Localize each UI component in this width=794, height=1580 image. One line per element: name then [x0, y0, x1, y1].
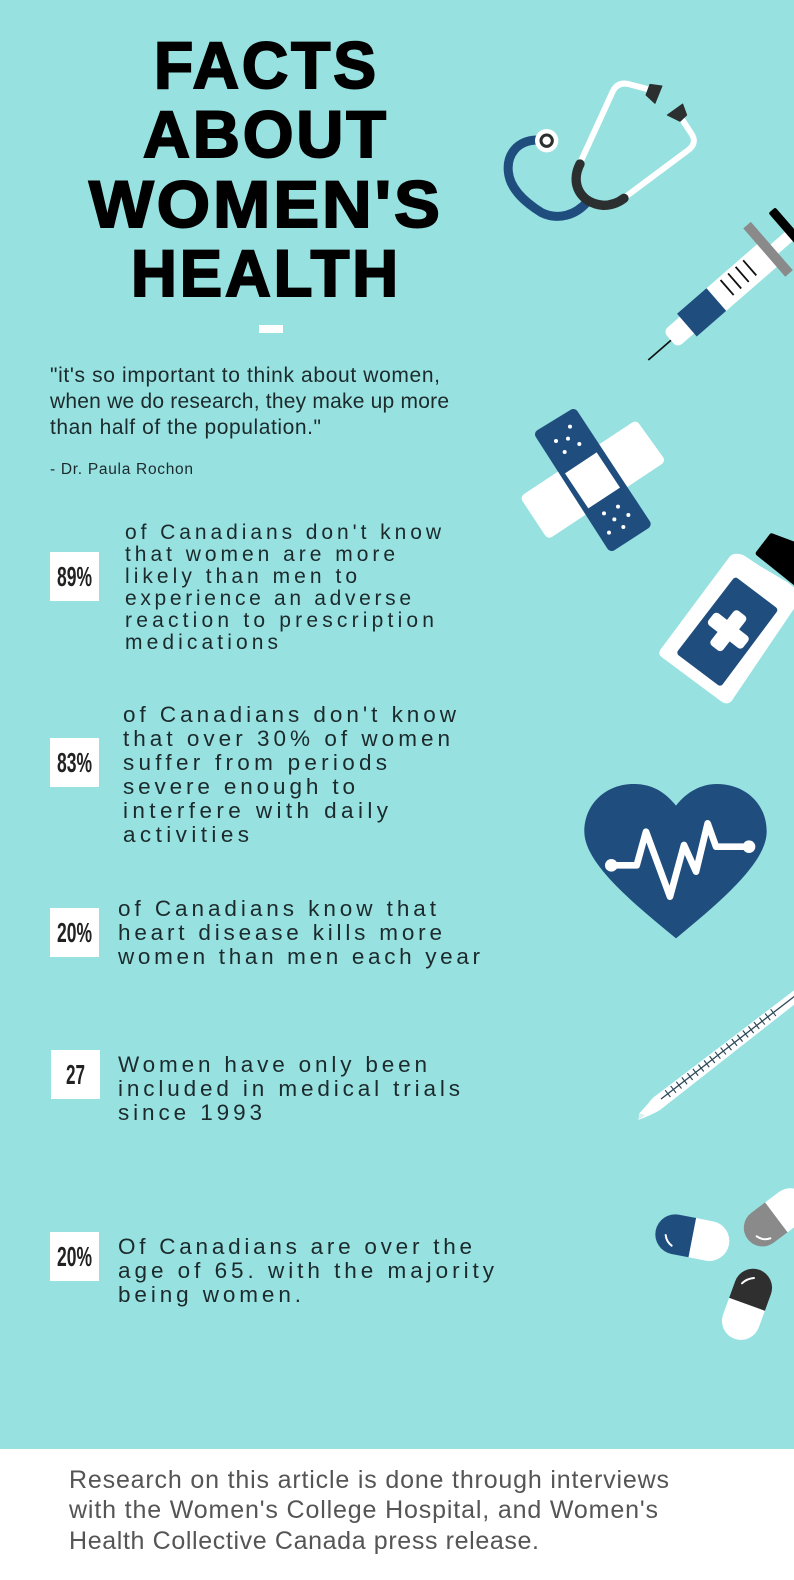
icon: heart with pulse line — [584, 784, 767, 938]
quote — [49, 364, 449, 439]
fact 4 text — [118, 1052, 460, 1125]
fact 1 text — [125, 521, 442, 654]
stat badge: 83%: 83% — [57, 747, 92, 778]
fact 1 — [50, 521, 442, 654]
stat badge: 27: 27 — [66, 1059, 85, 1090]
stat badge: 20% — [50, 1232, 99, 1281]
footer text: with the Women's College Hospital, and Women's — [68, 1496, 658, 1524]
title — [89, 28, 443, 310]
fact 3 — [50, 896, 480, 969]
footer text: Health Collective Canada press release. — [69, 1527, 539, 1555]
stat badge: 89%: 89% — [57, 561, 92, 592]
fact 3 text: of Canadians know that — [118, 896, 437, 921]
fact 2 text: interfere with daily — [123, 798, 389, 823]
stat badge: 20%: 20% — [57, 917, 92, 948]
quote: when we do research, they make up more — [49, 390, 449, 413]
pill: grey and white — [736, 1181, 794, 1254]
fact 2 text: suffer from periods — [123, 750, 387, 775]
stat badge: 27 — [51, 1050, 100, 1099]
fact 2 text: activities — [123, 822, 249, 847]
icon: bandage — [527, 414, 659, 546]
title: ABOUT — [143, 97, 389, 171]
fact 2 text — [123, 702, 457, 847]
fact 3 text: women than men each year — [117, 944, 480, 969]
fact 2 text: that over 30% of women — [123, 726, 450, 751]
fact 5 text: age of 65. with the majority — [118, 1258, 495, 1283]
icon: stethoscope — [508, 84, 694, 216]
title: FACTS — [154, 28, 379, 102]
footer band — [0, 1449, 794, 1580]
icon: thermometer — [638, 988, 794, 1120]
fact 5 text: Of Canadians are over the — [118, 1234, 472, 1259]
fact 1 text: medications — [125, 631, 278, 654]
fact 1 text: experience an adverse — [125, 587, 411, 610]
fact 2 — [50, 702, 457, 847]
fact 4 text: since 1993 — [118, 1100, 262, 1125]
fact 1 text: reaction to prescription — [125, 609, 434, 632]
footer text — [68, 1466, 669, 1555]
stat badge: 20% — [50, 908, 99, 957]
fact 4 text: Women have only been — [118, 1052, 427, 1077]
fact 5 text — [118, 1234, 495, 1307]
pill: navy and white — [652, 1211, 733, 1264]
stat badge: 89% — [50, 552, 99, 601]
icon: pills — [652, 1181, 794, 1345]
quote attribution: - Dr. Paula Rochon — [50, 461, 193, 478]
title: WOMEN'S — [89, 167, 443, 241]
quote: "it's so important to think about women, — [50, 364, 440, 387]
fact 1 text: likely than men to — [125, 565, 357, 588]
icon: syringe — [624, 203, 794, 381]
fact 5 text: being women. — [118, 1282, 301, 1307]
fact 2 text: severe enough to — [123, 774, 355, 799]
pill: black and white — [717, 1263, 777, 1345]
fact 2 text: of Canadians don't know — [123, 702, 457, 727]
fact 1 text: that women are more — [125, 543, 395, 566]
icon: medicine bottle — [661, 536, 794, 702]
stat badge: 20%: 20% — [57, 1241, 92, 1272]
fact 5 — [50, 1232, 495, 1307]
fact 1 text: of Canadians don't know — [125, 521, 442, 544]
title: HEALTH — [131, 236, 401, 310]
quote: than half of the population." — [50, 416, 321, 439]
title accent dash — [259, 325, 283, 333]
fact 4 text: included in medical trials — [118, 1076, 460, 1101]
fact 3 text — [117, 896, 480, 969]
fact 3 text: heart disease kills more — [118, 920, 442, 945]
fact 4 — [51, 1050, 460, 1125]
stat badge: 83% — [50, 738, 99, 787]
footer text: Research on this article is done through interviews — [69, 1466, 669, 1494]
